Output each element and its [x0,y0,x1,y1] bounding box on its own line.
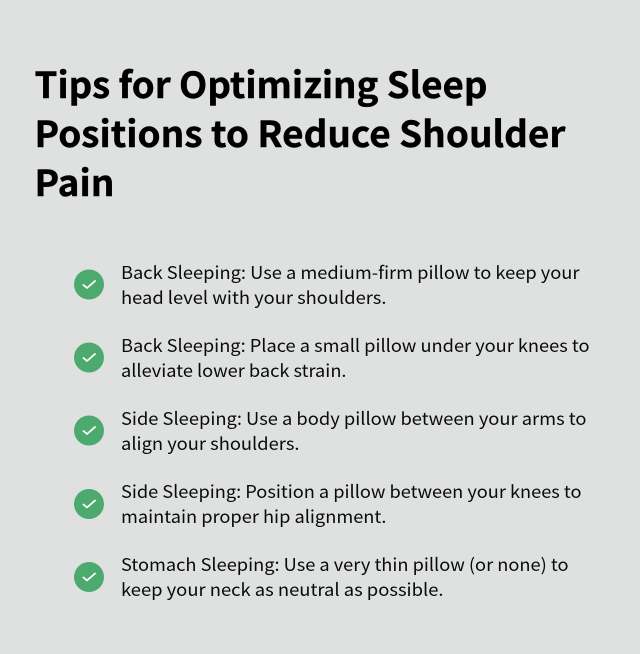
text: side sleeping knees: Side Sleeping: Position a pillow between your knees to [121,479,582,504]
text: back sleeping knees: Back Sleeping: Place a small pillow under your knees to [121,333,590,358]
icon: check mark [74,489,104,519]
title: Positions to Reduce Shoulder [34,106,566,158]
icon: check mark [74,416,104,446]
text: side sleeping body pillow: align your shoulders. [121,431,300,456]
text: back sleeping pillow: head level with your shoulders. [121,285,386,310]
title: Tips for Optimizing Sleep [34,57,488,109]
icon: check mark [74,342,104,372]
list item 5 [74,552,568,602]
icon: check mark [74,562,104,592]
text: stomach sleeping: keep your neck as neutral as possible. [121,577,444,602]
list item 2 [74,333,590,383]
text: side sleeping body pillow: Side Sleeping: Use a body pillow between your arms to [121,406,586,431]
text: stomach sleeping [121,552,568,602]
list item 4 [74,479,582,529]
title [34,57,566,207]
text: back sleeping pillow: Back Sleeping: Use a medium-firm pillow to keep your [121,260,580,285]
text: side sleeping body pillow [121,406,586,456]
icon: check mark [74,270,104,300]
title: Pain [34,155,114,207]
text: back sleeping knees: alleviate lower back strain. [121,358,346,383]
text: side sleeping knees [121,479,582,529]
text: back sleeping knees [121,333,590,383]
text: side sleeping knees: maintain proper hip alignment. [121,504,386,529]
list item 3 [74,406,586,456]
list item 1 [74,260,580,310]
text: stomach sleeping: Stomach Sleeping: Use a very thin pillow (or none) to [121,552,568,577]
text: back sleeping pillow [121,260,580,310]
